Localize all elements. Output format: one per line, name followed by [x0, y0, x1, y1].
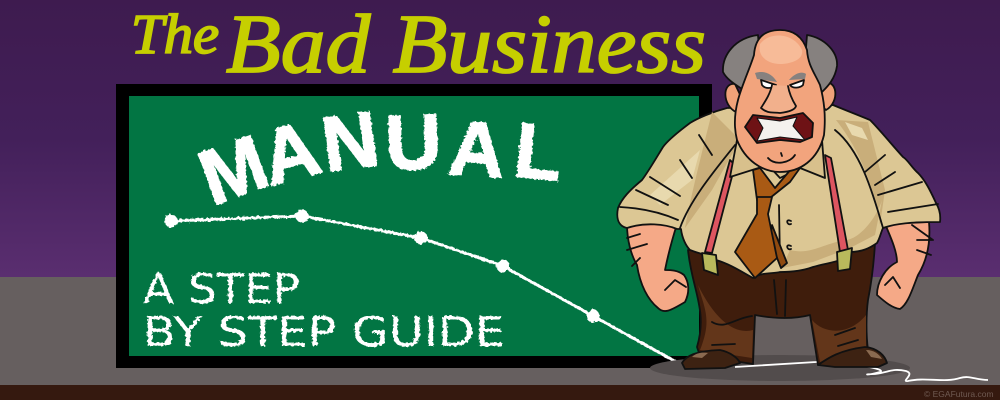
board frame: [116, 84, 712, 368]
left shoe toe: [692, 353, 708, 358]
left suspender clip: [702, 253, 718, 275]
grey hair: [723, 35, 837, 92]
angry businessman: [617, 30, 940, 369]
board surface: [129, 96, 699, 356]
chalk heading: MANUAL: MANUAL: [188, 94, 567, 222]
right shoe: [818, 347, 887, 367]
right eyebrow: [789, 73, 806, 80]
mouth: [745, 113, 813, 143]
collar: [730, 140, 825, 178]
tie knot and blade: [735, 197, 777, 278]
right suspender clip: [837, 248, 852, 271]
shirt highlights: [650, 122, 868, 205]
chalk line on floor: [735, 362, 988, 381]
title word: The: The: [131, 4, 219, 66]
title words: Bad Business: Bad Business: [226, 0, 706, 91]
nose: [761, 85, 796, 113]
right arm hair and finger lines: [885, 225, 933, 288]
title: [131, 0, 706, 91]
copyright: © EGAFutura.com: [924, 389, 994, 399]
shirt buttons: [779, 205, 791, 262]
left eye: [761, 80, 776, 88]
floor shadow: [650, 355, 910, 381]
head: [735, 30, 825, 172]
chalkboard: [116, 84, 712, 368]
purple wall background: [0, 0, 1000, 277]
right ear: [815, 82, 835, 110]
right suspender: [825, 155, 848, 252]
shirt shading: [685, 112, 885, 268]
right forearm and fist: [877, 222, 929, 309]
chalk subtitle line 2: BY STEP GUIDE: [143, 308, 505, 356]
left suspender: [705, 160, 735, 253]
clenched teeth: [757, 117, 805, 141]
right shoe toe: [866, 350, 882, 359]
left sleeve folds: [620, 135, 735, 228]
chalk subtitle line 1: A STEP: [143, 265, 300, 313]
trousers: [688, 243, 875, 365]
left ear: [725, 84, 745, 112]
left eyebrow: [755, 72, 777, 82]
chin: [768, 153, 795, 163]
tie loop: [753, 168, 800, 200]
left forearm and fist: [627, 224, 688, 311]
declining line chart: [164, 210, 680, 364]
left arm hair and finger lines: [627, 234, 686, 290]
necktie: [735, 168, 800, 278]
shirt torso and sleeves: [617, 105, 940, 278]
right sleeve folds: [835, 130, 938, 228]
forehead highlight: [760, 36, 802, 64]
grey floor: [0, 277, 1000, 385]
trouser highlight and creases: [698, 285, 866, 362]
left shoe: [682, 350, 740, 369]
tie tail: [770, 225, 787, 268]
right eye: [790, 80, 804, 88]
dark brown baseboard: [0, 385, 1000, 400]
